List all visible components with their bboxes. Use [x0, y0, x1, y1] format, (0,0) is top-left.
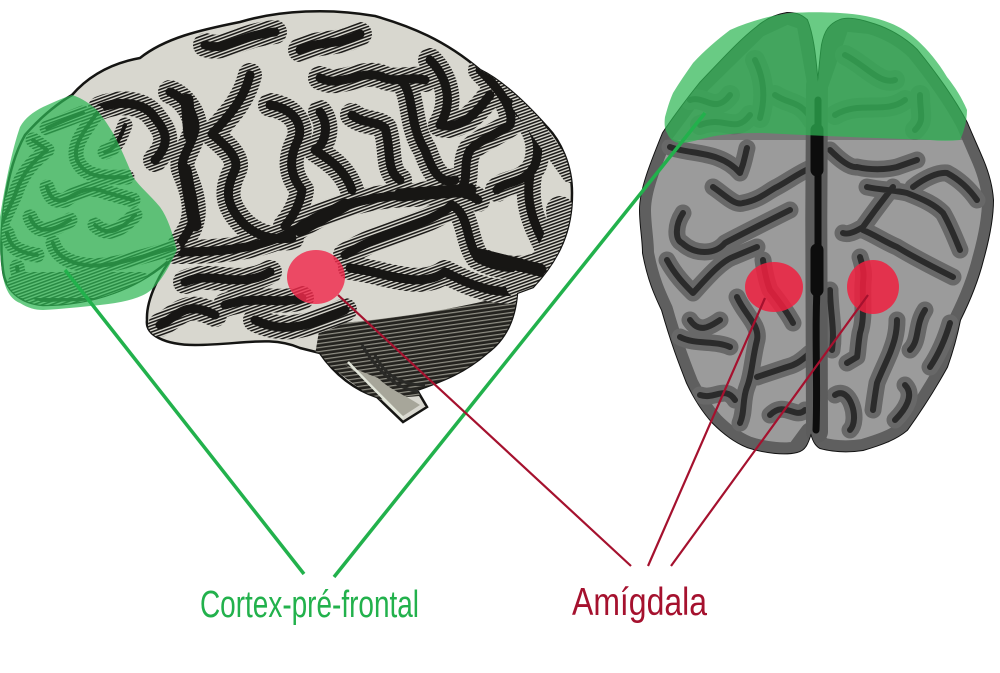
- green overlay: prefrontal cortex side view: [0, 95, 177, 310]
- label: Cortex-pré-frontal: Cortex-pré-frontal: [200, 584, 419, 626]
- red overlay: amygdala top view right: [847, 260, 899, 314]
- red overlay: amygdala top view left: [745, 262, 803, 312]
- red leader lines: [338, 295, 868, 566]
- top view gyri and sulci: [640, 10, 995, 453]
- red overlay: amygdala side view: [287, 250, 345, 304]
- label: Amígdala: Amígdala: [572, 581, 707, 624]
- engraved shading and sulci: [0, 32, 570, 327]
- green overlay: prefrontal cortex top view: [665, 12, 967, 143]
- cerebellum: [315, 292, 520, 418]
- top view brain: [640, 10, 995, 453]
- side view brain illustration: [0, 11, 572, 422]
- cerebrum and cerebellum silhouette: [1, 11, 572, 422]
- top view silhouette: [640, 13, 993, 453]
- green leader lines: [65, 113, 705, 577]
